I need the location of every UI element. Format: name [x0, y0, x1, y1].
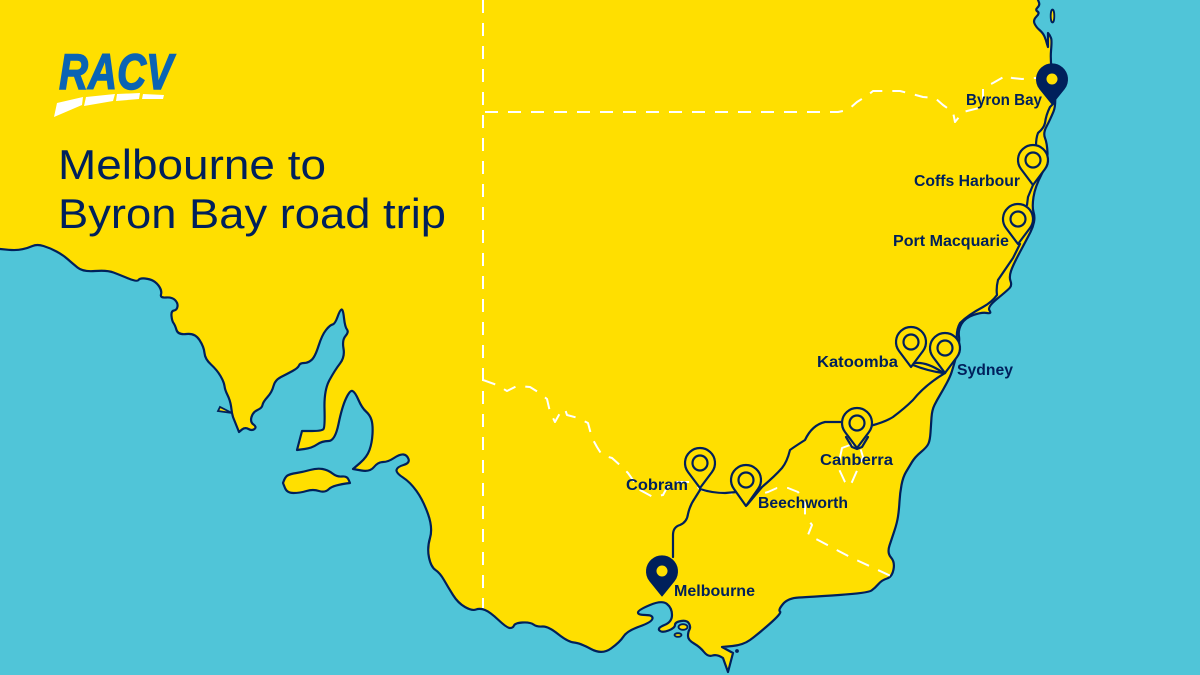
pin: Katoomba: [896, 327, 926, 367]
title: Melbourne to: [58, 141, 326, 188]
label: Canberra: Canberra: [820, 452, 893, 469]
label: Port Macquarie: Port Macquarie: [893, 233, 1009, 250]
label: Katoomba: Katoomba: [817, 354, 898, 371]
pin: Sydney: [930, 333, 960, 373]
pin: Cobram: [685, 448, 715, 488]
road trip route: [673, 103, 1054, 557]
logo: RACV: RACV: [59, 44, 176, 100]
pin: Port Macquarie: [1003, 204, 1033, 244]
pin: Coffs Harbour: [1018, 145, 1048, 185]
pin: Canberra: [842, 408, 872, 448]
title: Byron Bay road trip: [58, 190, 446, 237]
map: Kangaroo Island: [283, 469, 350, 493]
pin: Beechworth: [731, 465, 761, 506]
label: Byron Bay: Byron Bay: [966, 92, 1042, 109]
map: small islands: [218, 10, 1054, 652]
pin: Byron Bay (end): [1036, 64, 1068, 104]
label: Coffs Harbour: Coffs Harbour: [914, 173, 1020, 190]
label: Cobram: Cobram: [626, 477, 688, 494]
label: Sydney: Sydney: [957, 362, 1013, 379]
logo: RACV: [54, 44, 176, 117]
title: [58, 141, 446, 237]
label: Melbourne: Melbourne: [674, 583, 755, 600]
pin: Melbourne (start): [646, 556, 678, 596]
state borders: dashed white lines: [483, 0, 1036, 608]
label: Beechworth: Beechworth: [758, 495, 848, 512]
